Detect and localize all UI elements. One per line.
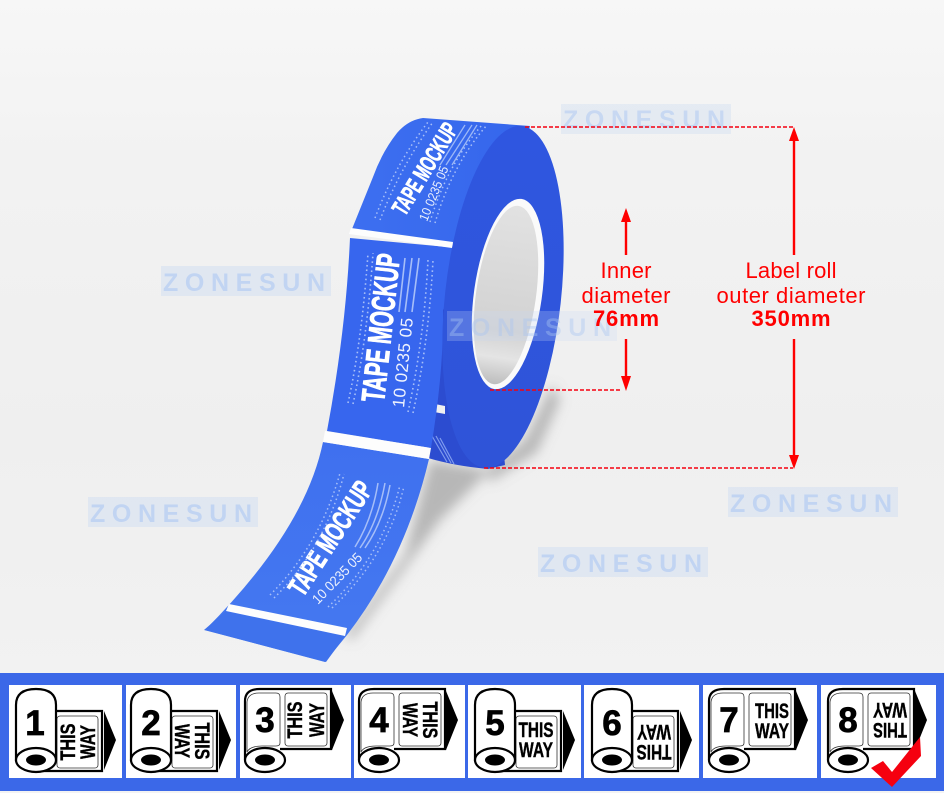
winding icon 4: 4 xyxy=(369,701,389,740)
white gap showing on underside xyxy=(434,404,445,414)
winding icon 1: THIS xyxy=(57,724,80,760)
watermarks: ZONESUN: ZONESUN xyxy=(540,550,702,578)
winding icon 2: WAY xyxy=(170,724,193,758)
dimension: inner diameter guide xyxy=(490,389,620,391)
roll underside (dark tape behind the hanging strip) xyxy=(428,300,505,469)
winding icon 5: WAY xyxy=(519,739,553,762)
label: outer diameter xyxy=(716,258,866,331)
watermarks: ZONESUN: ZONESUN xyxy=(90,500,252,528)
printed text top: 10 0235 05 xyxy=(416,164,452,223)
label: outer diameter: outer diameter xyxy=(716,283,866,308)
core xyxy=(461,194,555,394)
label: inner diameter: 76mm xyxy=(593,306,659,331)
cell backgrounds xyxy=(9,685,936,778)
core hole xyxy=(464,202,548,388)
watermarks: ZONESUN: ZONESUN xyxy=(163,269,325,297)
winding icon 2: 2 xyxy=(141,704,161,743)
winding icon 3: THIS xyxy=(284,702,307,738)
arrow: inner diameter xyxy=(621,208,631,391)
printed text bottom: TAPE MOCKUP xyxy=(282,475,379,601)
winding icon 3: 3 xyxy=(255,701,275,740)
winding icon 8: WAY xyxy=(873,698,907,721)
watermark over roll: ZONESUN xyxy=(449,314,611,342)
panel: winding direction strip xyxy=(0,673,944,791)
watermarks: ZONESUN: ZONESUN xyxy=(730,490,892,518)
label: inner diameter: diameter xyxy=(582,283,670,308)
winding icon 7 xyxy=(709,689,808,772)
printed text middle: TAPE MOCKUP xyxy=(354,252,407,404)
winding icon 1: 1 xyxy=(25,704,45,743)
winding icon 7: 7 xyxy=(719,701,739,740)
printed dots middle xyxy=(348,253,433,413)
roll shadow xyxy=(345,385,560,640)
label: outer diameter: 350mm xyxy=(752,306,830,331)
middle tape surface xyxy=(327,238,480,448)
white gap 2 xyxy=(323,431,431,459)
winding icon 2: THIS xyxy=(190,722,213,760)
winding icon 1 xyxy=(16,689,116,772)
winding icon 5 xyxy=(475,689,575,772)
winding icon 3: WAY xyxy=(306,703,329,737)
printed lines bottom xyxy=(355,483,390,548)
label roll xyxy=(204,118,580,662)
arrow: outer diameter xyxy=(789,127,799,469)
winding icon 6: 6 xyxy=(602,704,622,743)
printed lines top xyxy=(440,125,477,165)
winding icon 7: THIS xyxy=(755,700,789,723)
printed dots bottom xyxy=(270,473,404,608)
watermarks: ZONESUN xyxy=(88,104,898,578)
label: inner diameter: Inner xyxy=(600,258,652,283)
winding icon 1: WAY xyxy=(77,725,100,759)
label: outer diameter: Label roll xyxy=(746,258,836,283)
winding icon 6 xyxy=(592,689,692,772)
roll face xyxy=(426,120,580,474)
winding icon 8: 8 xyxy=(838,701,858,740)
top tape surface xyxy=(352,118,530,250)
label: inner diameter xyxy=(582,258,670,331)
winding icon 5: 5 xyxy=(485,704,505,743)
winding icon 2 xyxy=(131,689,231,772)
winding icon 7: WAY xyxy=(755,720,789,743)
winding icon 4: WAY xyxy=(398,703,421,737)
winding icon 6: THIS xyxy=(636,740,672,763)
printed lines middle xyxy=(399,258,419,312)
winding icon 3 xyxy=(245,689,344,772)
printed text bottom: 10 0235 05 xyxy=(309,549,365,607)
winding icon 6: WAY xyxy=(637,720,671,743)
icon: red check mark xyxy=(871,737,921,787)
printed dots top xyxy=(375,122,487,223)
watermarks: ZONESUN: ZONESUN xyxy=(563,106,725,134)
winding icon 4: THIS xyxy=(418,702,441,738)
white gap 1 xyxy=(349,228,453,248)
printed text top: TAPE MOCKUP xyxy=(387,118,464,220)
dimension: outer diameter guides xyxy=(484,127,793,468)
bottom end of tape xyxy=(204,610,345,662)
printed text middle xyxy=(354,252,417,408)
winding icon 8 xyxy=(828,689,927,772)
white gap 3 xyxy=(226,604,347,636)
lower tape strip xyxy=(205,442,429,662)
printed text top xyxy=(387,118,464,223)
printed text bottom xyxy=(282,475,379,607)
strip lower section on underside xyxy=(432,436,454,464)
winding icon 5: THIS xyxy=(518,719,554,742)
winding icon 4 xyxy=(359,689,458,772)
winding icon 8: THIS xyxy=(873,718,907,741)
printed text middle: 10 0235 05 xyxy=(389,317,417,408)
